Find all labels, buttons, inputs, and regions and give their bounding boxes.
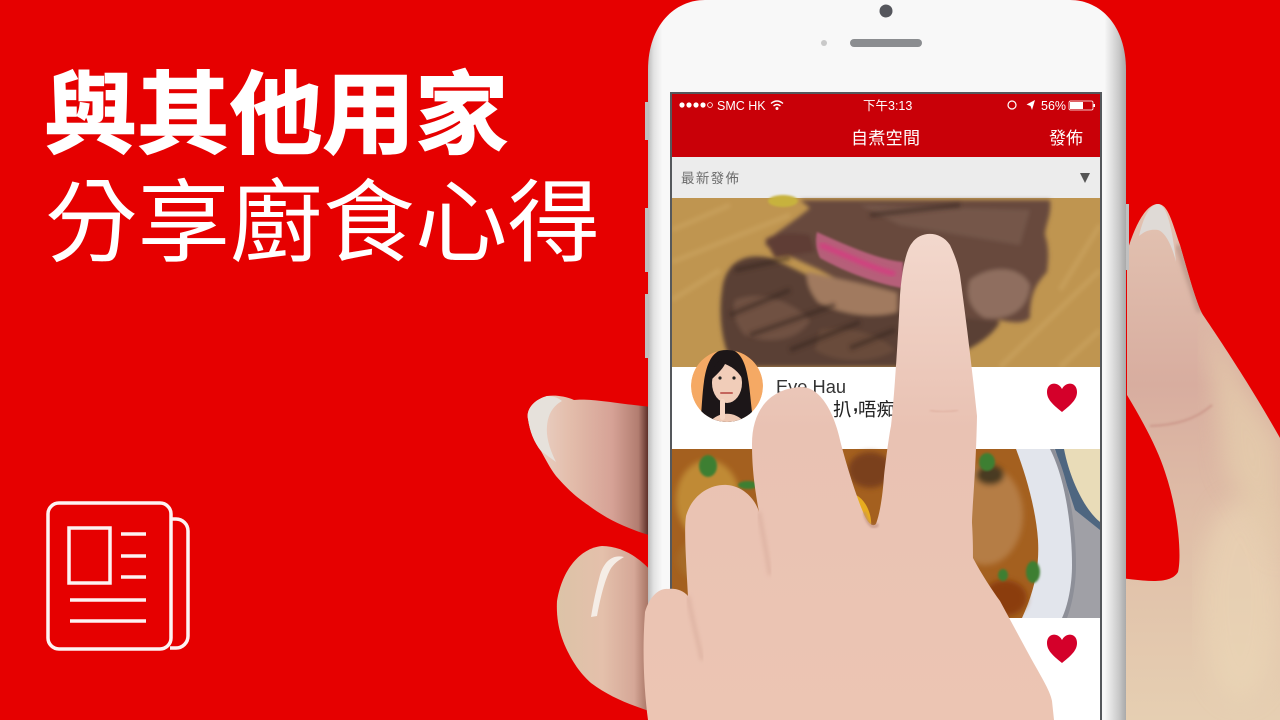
finger gap ring-middle (759, 512, 770, 575)
post caption: 扒 (833, 399, 852, 420)
upper left finger (528, 396, 652, 536)
sensor (821, 40, 827, 46)
finger gap pinky-ring (688, 596, 702, 660)
grill marks (730, 205, 960, 350)
knuckle crease (930, 410, 958, 412)
title line 1: 與其他用家 (44, 66, 508, 166)
status bar (679, 99, 1095, 112)
steak lower dark base (721, 256, 1000, 367)
icon: location arrow (1026, 100, 1035, 110)
curry (672, 449, 1038, 618)
lower left nail (591, 556, 624, 617)
icon: newspaper (48, 503, 188, 649)
signal dots (679, 102, 712, 108)
palm highlight (1205, 506, 1275, 669)
post caption: , (853, 394, 858, 415)
icon: battery (1069, 101, 1095, 110)
sort arrow (1080, 173, 1090, 183)
cut slice (807, 272, 897, 315)
icon: wifi (771, 101, 783, 109)
steak photo (672, 195, 1100, 367)
plate (672, 449, 1076, 618)
curry photo (672, 449, 1100, 618)
phone (645, 0, 1129, 720)
app header (672, 94, 1100, 157)
post 1 card (691, 350, 1077, 422)
battery percent: 56% (1041, 99, 1066, 113)
user name: Eve Hau (776, 377, 846, 397)
speaker (850, 39, 922, 47)
yellow piece (855, 495, 871, 525)
pointing hand (644, 234, 1054, 720)
naan (1064, 449, 1100, 522)
yellow garnish (768, 195, 798, 207)
screen frame (670, 92, 1102, 720)
knuckle crease (1150, 405, 1212, 426)
title line 2: 分享廚食心得 (45, 174, 600, 274)
app title: 自煮空間 (851, 129, 920, 148)
fingernail right (1139, 204, 1176, 262)
dark edge (765, 233, 815, 258)
post caption: 唔痴 (858, 399, 895, 420)
thumb edge highlight (1208, 334, 1280, 516)
screen (670, 92, 1102, 720)
herbs (699, 453, 1040, 583)
title (44, 66, 600, 274)
shadow along phone edge (1125, 240, 1131, 720)
grilled patches (734, 296, 810, 340)
publish button: 發佈 (1049, 129, 1083, 148)
left hand fingers (528, 396, 652, 712)
icon: rotation lock (1008, 101, 1016, 109)
avatar (691, 349, 763, 425)
time: 下午3:13 (863, 99, 912, 113)
table (672, 449, 1100, 618)
carrier: SMC HK (717, 99, 766, 113)
pink cut (816, 232, 903, 288)
lower left finger (557, 546, 652, 712)
sort bar (672, 157, 1100, 198)
middle-index web shadow (864, 512, 878, 527)
steak upper (765, 200, 1050, 325)
hand silhouette with fingers (644, 234, 1054, 720)
phone body (648, 0, 1126, 720)
icon: heart (1047, 635, 1077, 663)
upper left nail (528, 396, 562, 462)
wooden board (672, 198, 1100, 367)
right hand (1120, 204, 1280, 720)
post 2 card (672, 618, 1100, 720)
blue side dish (1055, 449, 1100, 530)
sort label: 最新發佈 (681, 170, 739, 186)
icon: heart (1047, 384, 1077, 412)
right hand back and thumb (1120, 204, 1280, 720)
thumb side band (1178, 245, 1200, 312)
side buttons (645, 102, 1129, 358)
camera (880, 4, 892, 18)
steak upper highlights (869, 206, 1028, 244)
